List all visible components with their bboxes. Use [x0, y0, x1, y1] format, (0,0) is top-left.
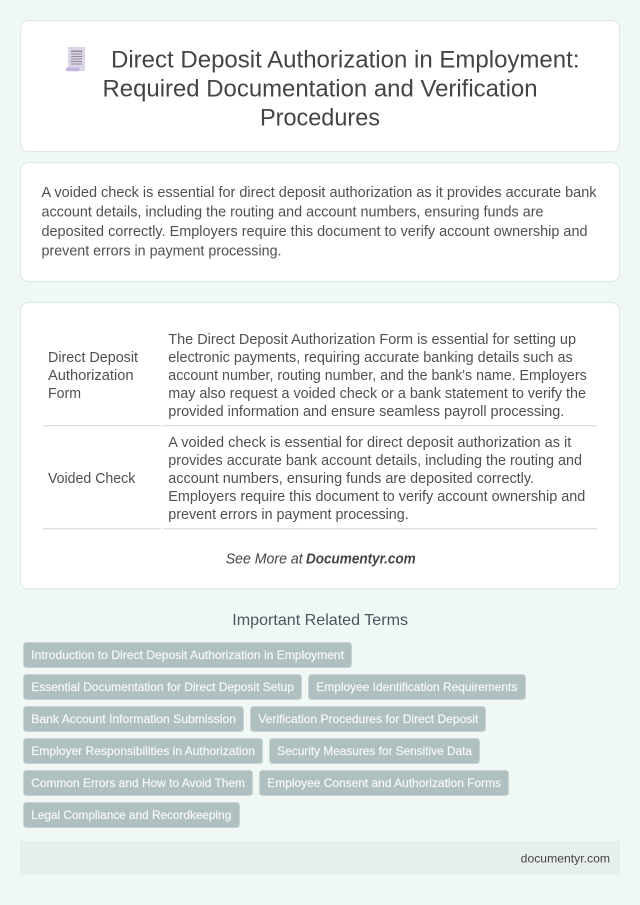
row description: account number, routing number, and the bank's name. Employers — [168, 368, 587, 384]
row description: may also request a voided check or a bank statement to verify the — [168, 386, 586, 402]
row description: prevent errors in payment processing. — [168, 507, 409, 523]
tag — [24, 802, 240, 828]
intro paragraph: deposited correctly. Employers require this document to verify account ownership and — [42, 224, 588, 240]
row label: Voided Check — [48, 471, 136, 487]
table row: direct deposit authorization form — [43, 332, 597, 426]
intro paragraph: prevent errors in payment processing. — [42, 244, 282, 260]
tag: Essential Documentation for Direct Deposit Setup — [31, 680, 294, 694]
row description: The Direct Deposit Authorization Form is essential for setting up — [168, 332, 576, 348]
panel: documents table card — [20, 302, 620, 589]
tag — [24, 738, 262, 764]
tag — [270, 738, 480, 764]
row description: Employers require this document to verify account ownership and — [168, 489, 585, 505]
related term tags — [24, 642, 526, 828]
row description: account numbers, ensuring funds are deposited correctly. — [168, 471, 534, 487]
tag — [24, 770, 252, 796]
row description: provides accurate bank account details, including the routing and — [168, 453, 582, 469]
tag — [24, 674, 302, 700]
row label: Authorization — [48, 368, 134, 384]
row description: A voided check is essential for direct deposit authorization as it — [168, 435, 571, 451]
footer domain: documentyr.com — [521, 851, 610, 865]
see more link: Documentyr.com — [306, 552, 416, 568]
panel: title card — [20, 20, 620, 152]
title: Required Documentation and Verification — [102, 76, 538, 102]
row description — [168, 435, 585, 523]
footer bar — [20, 841, 620, 875]
intro paragraph: account details, including the routing and account numbers, ensuring funds are — [42, 204, 544, 220]
tag: Introduction to Direct Deposit Authorization in Employment — [31, 648, 345, 662]
row description: provided information and ensure seamless payroll processing. — [168, 404, 564, 420]
row description — [168, 332, 587, 420]
title: Direct Deposit Authorization in Employment: — [111, 46, 580, 74]
intro paragraph: A voided check is essential for direct deposit authorization as it provides accurate bank — [42, 185, 597, 201]
icon: document scroll — [66, 47, 85, 72]
tag: Verification Procedures for Direct Deposit — [258, 712, 479, 726]
tag: Common Errors and How to Avoid Them — [31, 776, 245, 790]
intro paragraph — [42, 185, 597, 260]
tag: Employee Consent and Authorization Forms — [267, 776, 501, 790]
title: Procedures — [260, 104, 380, 132]
heading: important related terms: Important Related Terms — [232, 612, 408, 629]
tag: Security Measures for Sensitive Data — [277, 744, 472, 758]
row description: electronic payments, requiring accurate banking details such as — [168, 350, 573, 366]
panel: intro text card — [20, 162, 620, 282]
row label: Direct Deposit — [48, 350, 138, 366]
tag: Bank Account Information Submission — [31, 712, 236, 726]
tag — [308, 674, 526, 700]
title — [102, 46, 580, 132]
tag: Employee Identification Requirements — [316, 680, 517, 694]
tag — [24, 642, 352, 668]
tag: Employer Responsibilities in Authorization — [31, 744, 255, 758]
tag — [250, 706, 486, 732]
see more link: See More at — [226, 552, 304, 568]
tag — [24, 706, 244, 732]
tag: Legal Compliance and Recordkeeping — [31, 808, 231, 822]
tag — [260, 770, 508, 796]
row label — [48, 350, 138, 402]
row label: Form — [48, 386, 81, 402]
table row: voided check — [43, 435, 597, 529]
see more link — [226, 552, 416, 568]
